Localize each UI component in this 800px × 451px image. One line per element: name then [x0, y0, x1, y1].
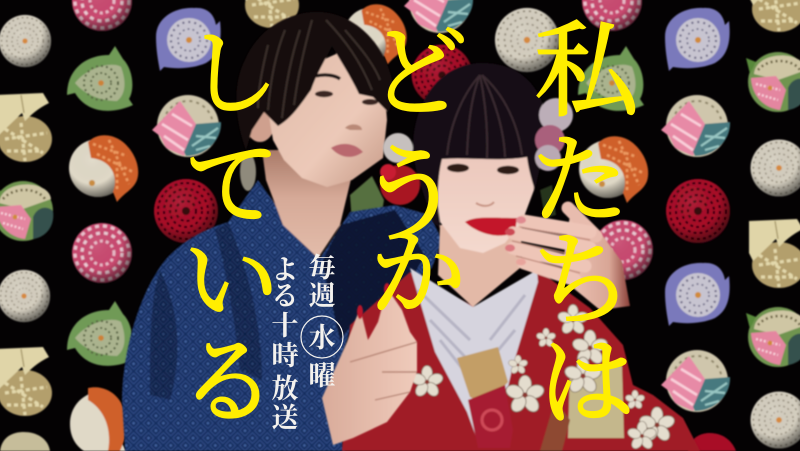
broadcast schedule: 10pm: る [272, 281, 298, 311]
broadcast schedule: every Wednesday: 週 [308, 281, 336, 311]
title: right column: ち [531, 226, 633, 339]
hair flowers right [535, 98, 573, 218]
woman red kimono [342, 270, 700, 451]
title: right column: は [539, 330, 635, 437]
broadcast schedule: 10pm: よ [272, 255, 298, 285]
hair flowers left [380, 133, 420, 205]
title: middle column: か [370, 221, 466, 328]
broadcast schedule: 10pm [272, 255, 300, 433]
woman neck [438, 225, 522, 307]
title: middle column [357, 18, 468, 328]
title: left column: る [180, 329, 276, 436]
broadcast schedule: 10pm: 十 [272, 311, 298, 341]
man neck [262, 150, 352, 258]
broadcast schedule: 10pm: 送 [272, 403, 300, 433]
man hand on kimono [322, 283, 417, 445]
red cord knot [468, 385, 513, 448]
title: left column [180, 23, 280, 436]
broadcast schedule: every Wednesday: 曜 [308, 361, 336, 391]
man kimono [122, 180, 442, 451]
gold brocade panel [568, 366, 624, 438]
man face [268, 50, 387, 187]
woman hand on face [505, 205, 630, 310]
broadcast schedule: every Wednesday: 水 [308, 323, 336, 353]
man figure [122, 12, 442, 451]
weekday circle [301, 316, 343, 358]
title: middle column: ど [368, 18, 468, 129]
broadcast schedule: every Wednesday [301, 253, 343, 391]
man eyes nose and lips [315, 75, 378, 157]
broadcast schedule: 10pm: 時 [272, 341, 298, 371]
broadcast schedule: every Wednesday: 毎 [308, 253, 336, 283]
title: left column: て [184, 132, 280, 239]
woman hair [413, 63, 546, 228]
woman eyes nose and lips [447, 164, 519, 236]
sakura pattern on kimono [410, 304, 676, 451]
title: right column: 私 [534, 15, 641, 130]
man hair [236, 12, 394, 150]
white collar [410, 268, 538, 442]
broadcast schedule: 10pm: 放 [272, 374, 298, 404]
title: right column [531, 15, 641, 437]
title: left column: い [183, 228, 279, 335]
man ear [246, 108, 274, 142]
title: left column: し [185, 23, 279, 127]
woman face [430, 150, 534, 253]
gold hakoseko pouch [457, 347, 508, 405]
woman figure [342, 63, 700, 451]
title: middle column: う [357, 138, 463, 255]
title: right column: た [531, 128, 629, 236]
